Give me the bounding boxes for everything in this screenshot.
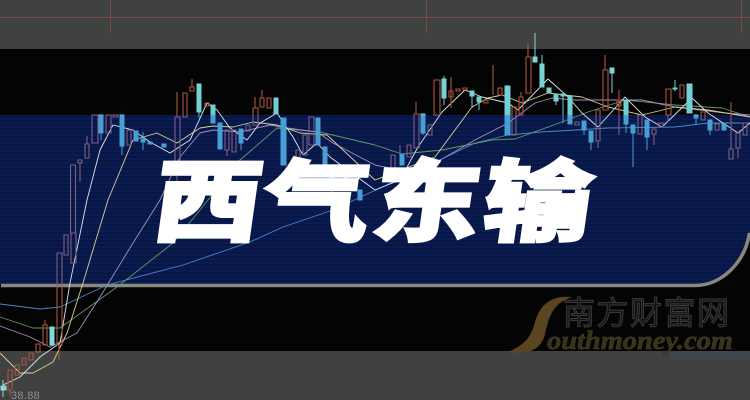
top gray band: [0, 0, 750, 49]
line: pale fast average: [3, 79, 750, 385]
moving average lines: [0, 79, 750, 385]
blue title panel: [0, 115, 750, 286]
title glyph 西: 西: [147, 153, 269, 253]
bottom gray band: [0, 351, 750, 400]
watermark S swoosh: [508, 297, 572, 353]
bluish smear below watermark: [670, 351, 750, 360]
title glyph 输: 输: [477, 153, 599, 253]
watermark Chinese name: 南方财富网: [563, 295, 731, 331]
line: green average: [0, 100, 750, 328]
title: [147, 153, 599, 253]
title glyph 气: 气: [256, 153, 378, 253]
watermark: southmoney: [508, 295, 733, 355]
line: lavender average: [0, 98, 750, 347]
line: yellow average: [0, 93, 750, 373]
line: long blue average: [0, 123, 750, 309]
watermark domain: outhmoney.com: [547, 326, 733, 355]
red crosshair lines: [0, 0, 750, 33]
title glyph 东: 东: [366, 153, 488, 253]
black chart background: [0, 49, 750, 351]
